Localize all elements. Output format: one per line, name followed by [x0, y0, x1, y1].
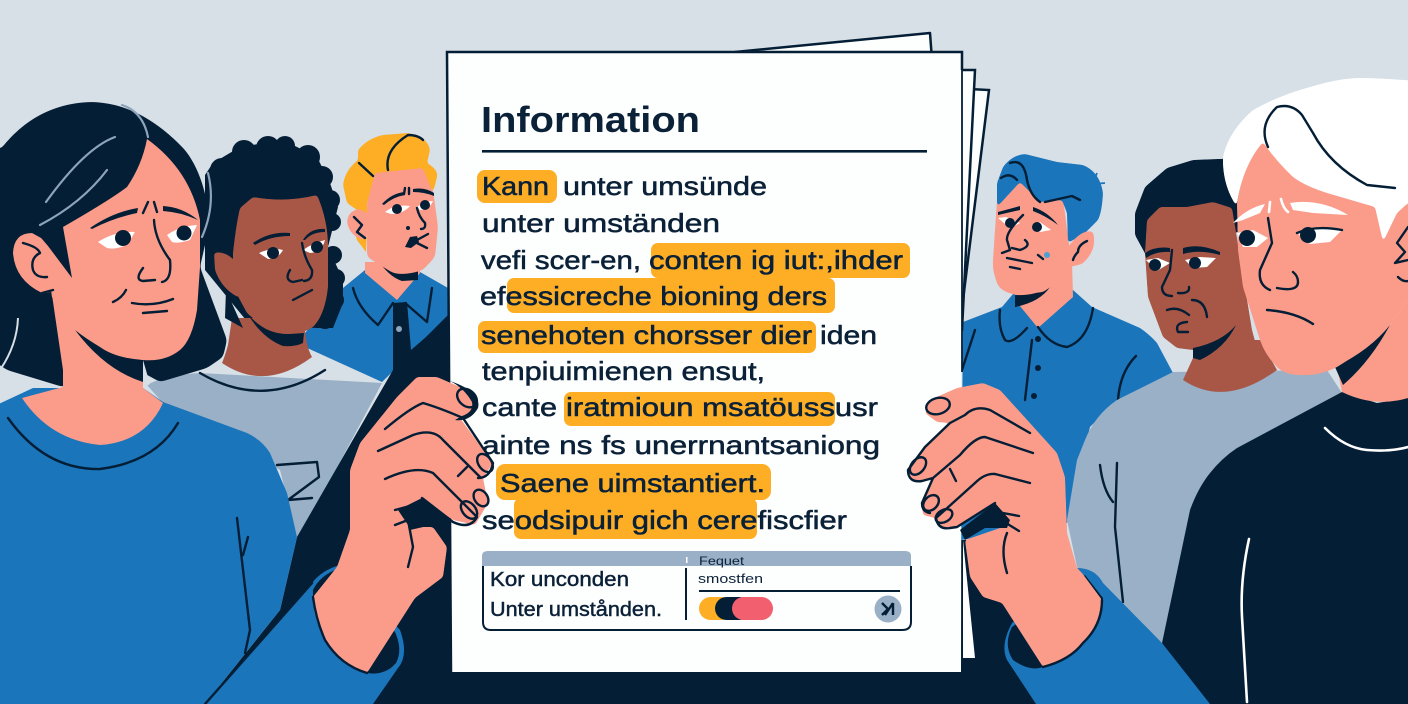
- text lines: cante: [482, 392, 557, 422]
- person: woman in blue sweater: [0, 102, 297, 704]
- person: white-haired man: [1162, 78, 1408, 704]
- text lines: tenpiuimienen ensut,: [482, 356, 765, 386]
- hair: [0, 102, 227, 387]
- summary table: Fequet: [699, 556, 745, 568]
- text lines: ainte ns fs unerrnantsaniong: [482, 430, 880, 460]
- white hair: [1223, 78, 1408, 242]
- nose and mouth: [113, 220, 173, 313]
- sleeve: [205, 565, 404, 704]
- text lines: seodsipuir gich cerefiscfier: [482, 505, 847, 535]
- table left text: Kor unconden: [490, 569, 629, 591]
- neck: [1337, 300, 1408, 402]
- eyes: [1237, 229, 1342, 247]
- table right label: smostfen: [698, 571, 763, 586]
- front sheet: [447, 52, 962, 672]
- cuff opening: [313, 568, 399, 674]
- table header: [482, 551, 911, 566]
- hand: [908, 383, 1102, 667]
- text lines: iratmioun msatöussusr: [566, 392, 878, 422]
- person: dark-haired man: [1067, 158, 1342, 643]
- summary table: [482, 551, 911, 630]
- text lines: conten ig iut:,ihder: [649, 245, 903, 275]
- sweater body: [0, 388, 297, 704]
- hair highlights: [40, 105, 211, 237]
- brows and eyes: [90, 206, 198, 229]
- icon: round arrow button: [874, 596, 902, 622]
- dark body behind paper: [205, 315, 1210, 704]
- person: blue-haired man: [961, 154, 1173, 540]
- table outline: [483, 566, 911, 630]
- heading rule: [482, 150, 927, 153]
- back sheet: [735, 33, 950, 60]
- sweater details: [8, 418, 250, 653]
- person: curly-haired woman: [147, 136, 382, 537]
- sideburn: [36, 227, 72, 278]
- stack of paper: [447, 33, 989, 672]
- summary table: Unter umstånden.: [490, 599, 662, 621]
- status pills: [699, 597, 773, 620]
- right hand and sleeve: [907, 383, 1210, 704]
- text lines: unter umsünde: [563, 171, 767, 201]
- black sweater: [1162, 392, 1408, 704]
- face: [1237, 135, 1408, 375]
- sleeve: [1004, 568, 1210, 704]
- highlighted body text: [477, 170, 910, 539]
- curly hair: [205, 136, 345, 329]
- brows: [1233, 202, 1348, 223]
- text lines: vefi scer-en,: [481, 245, 641, 275]
- ear: [13, 233, 72, 293]
- middle sheet: [950, 70, 975, 330]
- text lines: Saene uimstantiert.: [500, 468, 765, 498]
- highlights: [477, 170, 910, 539]
- face: [45, 139, 200, 360]
- hand: [313, 377, 493, 673]
- text lines: efessicreche bioning ders: [480, 281, 827, 311]
- nails: [453, 385, 496, 522]
- text lines: Kann: [482, 171, 549, 201]
- cuff opening: [1008, 575, 1103, 668]
- nails: [907, 395, 955, 526]
- nose and mouth: [1260, 218, 1408, 324]
- text lines: senehoten chorsser dier: [481, 320, 812, 350]
- text lines: [480, 171, 903, 535]
- person: blond man: [305, 133, 448, 382]
- heading: Information: [481, 99, 700, 140]
- left hand and sleeve: [205, 377, 496, 704]
- text lines: iden: [820, 320, 877, 350]
- neck: [22, 295, 163, 445]
- text lines: unter umständen: [482, 208, 720, 238]
